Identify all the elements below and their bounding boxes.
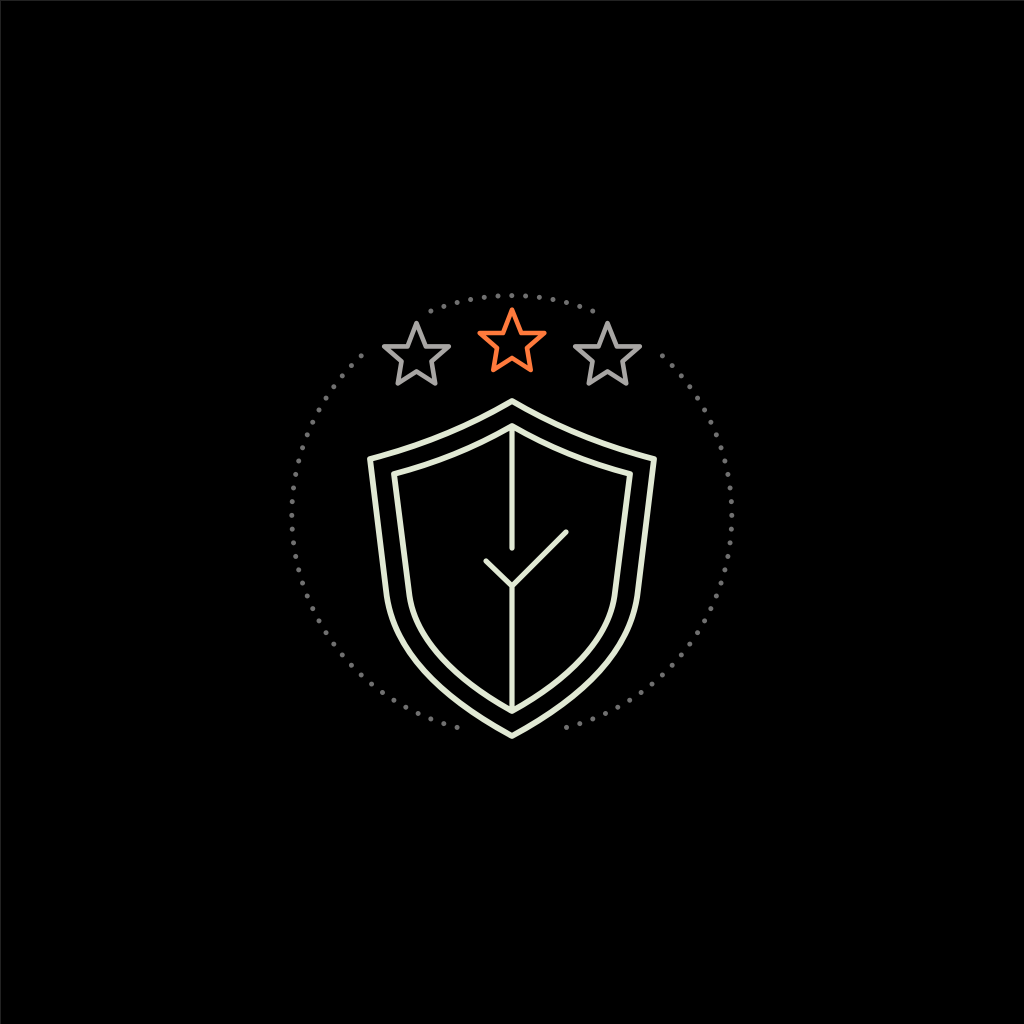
shield: outer outline bbox=[370, 401, 654, 736]
dotted ring: right arc bbox=[563, 352, 734, 730]
icon: right grey star bbox=[575, 323, 640, 383]
icon: centre orange star bbox=[480, 310, 544, 370]
dotted ring: left arc bbox=[289, 352, 460, 730]
shield: centre line and check mark bbox=[486, 426, 566, 711]
icon: left grey star bbox=[384, 323, 449, 383]
shield: inner outline bbox=[394, 426, 630, 711]
dotted ring: top arc bbox=[428, 293, 596, 314]
